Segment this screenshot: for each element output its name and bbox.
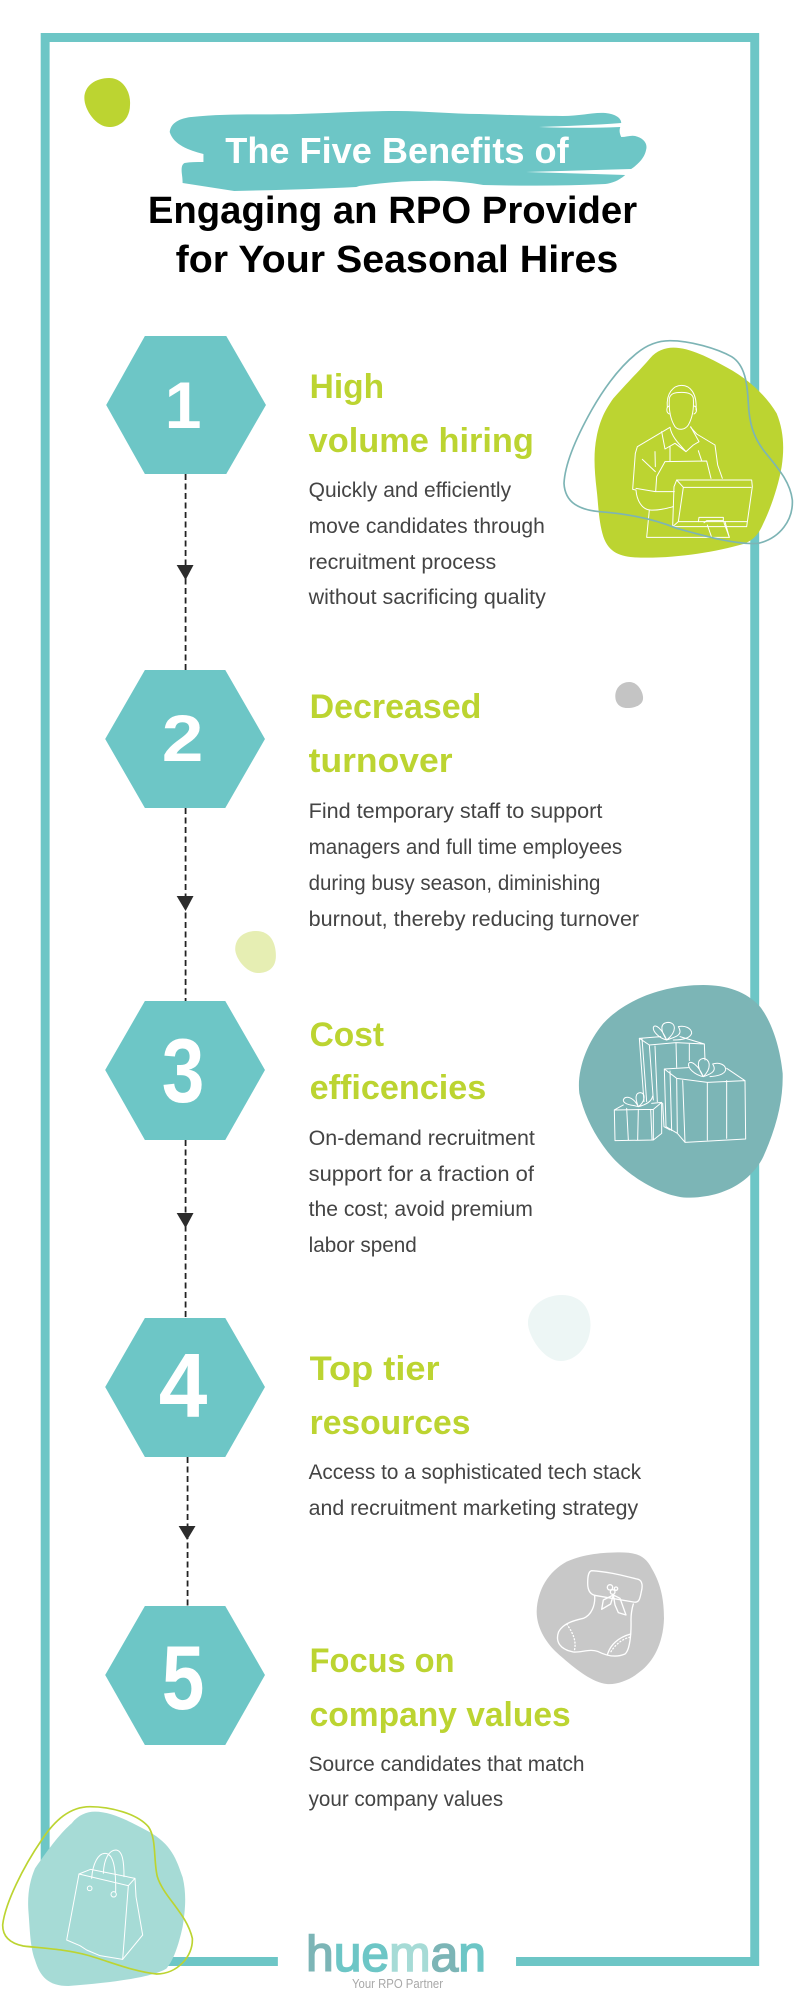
connector 2 to 3 [177, 808, 194, 1001]
body 5: Source candidates that match [309, 1753, 585, 1776]
hexagon 4: 4 [159, 1336, 207, 1437]
icon: worker at register on green blob [564, 341, 792, 558]
step 1 [106, 336, 546, 609]
logo: hueman [306, 1926, 486, 1991]
heading 1: volume hiring [309, 422, 534, 460]
hexagon 4 [105, 1318, 265, 1457]
decorative pale teal blob [528, 1295, 590, 1361]
heading 4 [310, 1350, 470, 1442]
heading 5 [310, 1642, 571, 1734]
heading 3: Cost [310, 1016, 384, 1054]
step 5 [105, 1606, 585, 1811]
thin blob outline [564, 341, 792, 544]
heading 3 [310, 1016, 486, 1107]
hexagon 2 [105, 670, 265, 808]
body 2: managers and full time employees [309, 836, 622, 859]
body 1: without sacrificing quality [308, 586, 546, 609]
grey blob [537, 1552, 664, 1684]
heading 1: High [310, 368, 384, 406]
body 1: recruitment process [309, 551, 496, 574]
connector 4 to 5 [179, 1457, 196, 1606]
heading 4: Top tier [310, 1350, 440, 1388]
heading 5: company values [310, 1696, 571, 1734]
body 4 [309, 1461, 642, 1520]
logo wordmark: hueman [306, 1926, 486, 1982]
body 2: during busy season, diminishing [309, 872, 600, 895]
heading 2 [309, 688, 481, 780]
heading 3: efficencies [310, 1069, 486, 1107]
heading 5: Focus on [310, 1642, 455, 1680]
icon: gift boxes on teal blob [579, 985, 783, 1198]
decorative grey blob [615, 682, 643, 708]
body 3: labor spend [309, 1234, 417, 1257]
body 3: On-demand recruitment [309, 1127, 535, 1150]
mint blob [28, 1812, 185, 1986]
stocking line art [557, 1571, 642, 1656]
body 1: Quickly and efficiently [309, 479, 512, 502]
body 4: and recruitment marketing strategy [309, 1497, 639, 1520]
hexagon 5 [105, 1606, 265, 1745]
heading 2: turnover [309, 742, 453, 780]
body 1 [308, 479, 546, 609]
body 2: Find temporary staff to support [309, 800, 603, 823]
body 3: support for a fraction of [309, 1163, 534, 1186]
hexagon 3: 3 [162, 1021, 204, 1122]
icon: shopping bag on mint blob [3, 1807, 192, 1986]
body 2: burnout, thereby reducing turnover [309, 908, 639, 931]
connector 3 to 4 [177, 1140, 194, 1318]
connector 1 to 2 [177, 474, 194, 670]
title block [148, 111, 646, 281]
hexagon 3 [105, 1001, 265, 1140]
step 3 [105, 1001, 535, 1257]
hexagon 1 [106, 336, 266, 474]
body 2 [309, 800, 639, 931]
body 4: Access to a sophisticated tech stack [309, 1461, 642, 1484]
body 1: move candidates through [309, 515, 545, 538]
heading 4: resources [310, 1404, 470, 1442]
hexagon 1: 1 [165, 368, 201, 442]
icon: stocking on grey blob [537, 1552, 664, 1684]
title line 2: Engaging an RPO Provider [148, 190, 637, 232]
decorative green blob, top left [84, 78, 130, 127]
logo tagline: Your RPO Partner [352, 1977, 443, 1991]
body 5 [309, 1753, 585, 1811]
decorative pale green blob [235, 931, 276, 973]
body 3 [309, 1127, 535, 1257]
body 5: your company values [309, 1788, 503, 1811]
title line 1: The Five Benefits of [225, 131, 570, 171]
teal blob [579, 985, 783, 1198]
worker line art [633, 385, 752, 537]
green blob [595, 348, 783, 558]
thin blob outline [3, 1807, 192, 1974]
bag line art [67, 1850, 143, 1959]
step 2 [105, 670, 639, 931]
title brush stroke [170, 111, 646, 191]
heading 1 [309, 368, 534, 460]
gifts line art [614, 1022, 746, 1142]
hexagon 5: 5 [162, 1628, 204, 1729]
title line 3: for Your Seasonal Hires [176, 239, 618, 281]
heading 2: Decreased [310, 688, 481, 726]
body 3: the cost; avoid premium [309, 1198, 533, 1221]
step 4 [105, 1318, 642, 1520]
hexagon 2: 2 [162, 701, 203, 775]
